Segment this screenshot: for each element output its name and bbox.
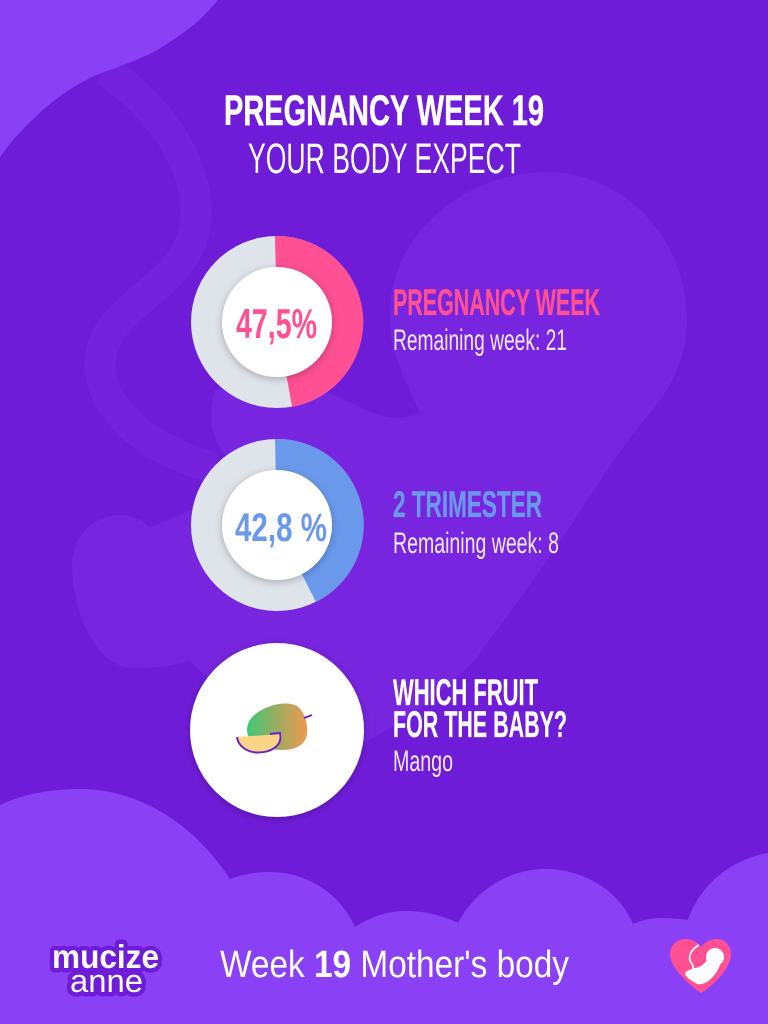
text block: pregnancy week: Remaining week: 21 [393,324,567,357]
background shape: faint umbilical curve [100,70,215,468]
bottom cloud band [0,789,768,1024]
icon: mango [237,703,312,752]
logo: mucize anne: mucize [52,938,159,975]
background shape: top left corner [0,0,218,157]
text block: pregnancy week: PREGNANCY WEEK [393,282,600,323]
logo: mucize anne [52,938,159,999]
donut chart: pregnancy week 47,5% [191,236,363,408]
text block: fruit: FOR THE BABY? [393,704,567,745]
fruit circle [190,643,364,817]
title: YOUR BODY EXPECT [248,135,521,183]
text block: fruit: Mango [393,745,453,778]
text block: trimester [393,484,559,560]
logo: mucize anne: anne [70,963,143,999]
donut chart: trimester 42,8% [191,439,364,611]
donut chart: pregnancy week 47,5%: 47,5% [236,300,317,347]
text block: fruit [393,672,567,778]
text block: trimester: Remaining week: 8 [393,527,559,560]
title: PREGNANCY WEEK 19 [224,87,544,135]
text block: trimester: 2 TRIMESTER [393,484,542,525]
icon: heart with baby [670,939,731,993]
background shape: large faint heart [72,172,687,780]
footer caption: Week 19 Mother's body [220,944,569,986]
title [224,87,544,183]
text block: pregnancy week [393,282,600,357]
donut chart: trimester 42,8%: 42,8 % [235,506,327,550]
text block: fruit: WHICH FRUIT [393,672,538,713]
